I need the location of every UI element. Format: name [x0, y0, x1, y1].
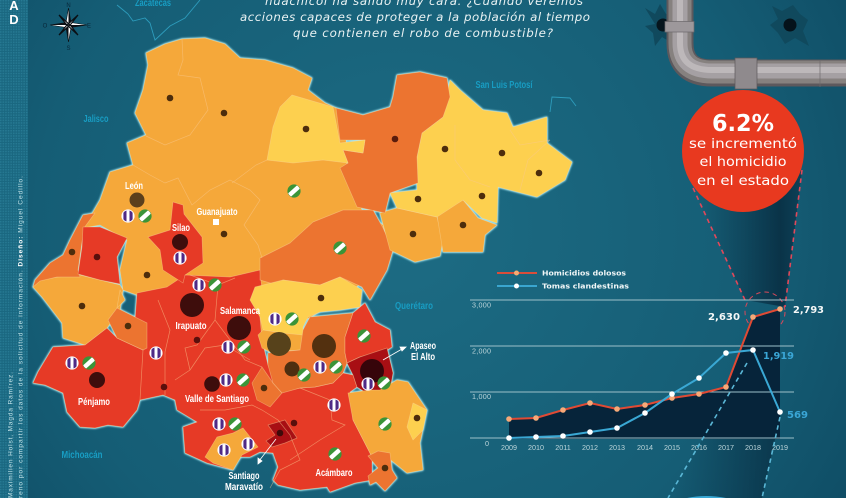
value labels: 1,919 — [763, 351, 794, 362]
neighbouring state labels: Jalisco — [84, 114, 108, 125]
homicide series — [506, 306, 783, 422]
axis labels: 2012 — [582, 443, 598, 452]
dashed connector lines — [693, 170, 802, 332]
axis labels: 2016 — [691, 443, 707, 452]
city labels: León — [125, 181, 143, 192]
markers: proportional dark circles — [89, 192, 384, 392]
markers: small municipality dots — [69, 95, 542, 471]
callout: 6.2%: 6.2% — [712, 111, 774, 137]
compass: N — [66, 3, 71, 9]
city labels: Silao — [172, 223, 190, 234]
map of Guanajuato municipalities — [33, 38, 572, 492]
axis labels: 1,000 — [472, 392, 491, 401]
city labels: Apaseo — [410, 341, 436, 352]
neighbouring state labels: Michoacán — [62, 450, 102, 461]
axis labels: 0 — [485, 439, 489, 448]
icon: Guanajuato capital square — [213, 219, 219, 225]
compass: O — [43, 24, 48, 30]
bullet hole left — [645, 4, 676, 46]
compass — [43, 3, 91, 52]
compass: E — [87, 24, 91, 30]
axis labels: 2010 — [528, 443, 544, 452]
value labels — [708, 305, 824, 421]
axis labels: 2017 — [718, 443, 734, 452]
neighbouring state labels — [62, 0, 533, 461]
cone under red callout — [693, 170, 802, 307]
callout: 6.2%: se incrementó — [689, 136, 797, 152]
callout: 6.2% — [682, 90, 804, 212]
markers: purple striped badges — [65, 209, 375, 457]
city labels: Santiago — [228, 471, 260, 482]
neighbouring state borders — [117, 0, 576, 112]
arrow: Apaseo El Alto — [383, 347, 406, 360]
city labels: Valle de Santiago — [185, 394, 249, 405]
axis labels: 2011 — [555, 443, 571, 452]
bullet hole right — [770, 5, 809, 46]
neighbouring state labels: San Luis Potosí — [476, 80, 533, 91]
markers: green striped badges — [82, 184, 392, 461]
area under homicide line — [509, 309, 780, 439]
heading text: que contienen el robo de combustible? — [293, 26, 554, 40]
heading text: acciones capaces de proteger a la población al tiempo — [240, 10, 590, 24]
axis labels: 2,000 — [472, 346, 491, 356]
axis labels: 2018 — [745, 443, 761, 452]
chart legend: Homicidios dolosos — [542, 268, 626, 278]
axis labels: 2019 — [772, 443, 788, 452]
left credits strip: Maximilien Holst, Magda Ramírez. — [8, 372, 14, 498]
city labels: Pénjamo — [78, 397, 110, 408]
value labels: 2,630 — [708, 312, 740, 323]
grid lines — [470, 300, 794, 438]
city labels — [78, 181, 436, 493]
internal municipal borders — [133, 39, 550, 488]
callout: 6.2%: en el estado — [697, 173, 789, 189]
axis labels — [472, 300, 788, 452]
chart legend: Tomas clandestinas — [542, 282, 629, 290]
city labels: El Alto — [411, 352, 435, 363]
blue dashed connector lines — [668, 363, 780, 498]
axis labels: 2009 — [501, 443, 517, 452]
left credits strip — [0, 0, 28, 498]
axis labels: 2013 — [609, 443, 625, 452]
city labels: Maravatío — [225, 482, 263, 493]
clandestine taps series — [506, 347, 783, 441]
compass: S — [66, 46, 71, 52]
axis labels: 2015 — [664, 443, 680, 452]
neighbouring state labels: Querétaro — [395, 301, 433, 312]
left credits strip: reno por compartir los datos de la solicitud de información. Diseño: Miguel Cedillo. — [18, 176, 24, 498]
arrow: Santiago Maravatío — [258, 439, 276, 464]
cone to lower callout — [668, 363, 780, 498]
city labels: Salamanca — [220, 306, 260, 317]
pipe — [665, 0, 846, 89]
city labels: Acámbaro — [316, 468, 352, 479]
city labels: Irapuato — [176, 321, 206, 332]
line chart — [470, 300, 824, 452]
axis labels: 2014 — [637, 443, 653, 452]
city labels: Guanajuato — [196, 207, 238, 218]
left credits strip: D — [9, 12, 19, 27]
axis labels: 3,000 — [472, 300, 491, 310]
callout: 6.2%: el homicidio — [700, 154, 786, 170]
value labels: 569 — [787, 410, 808, 421]
chart legend — [497, 268, 629, 290]
heading text — [240, 0, 590, 40]
value labels: 2,793 — [793, 305, 824, 316]
lower callout circle (cropped) — [687, 496, 726, 498]
